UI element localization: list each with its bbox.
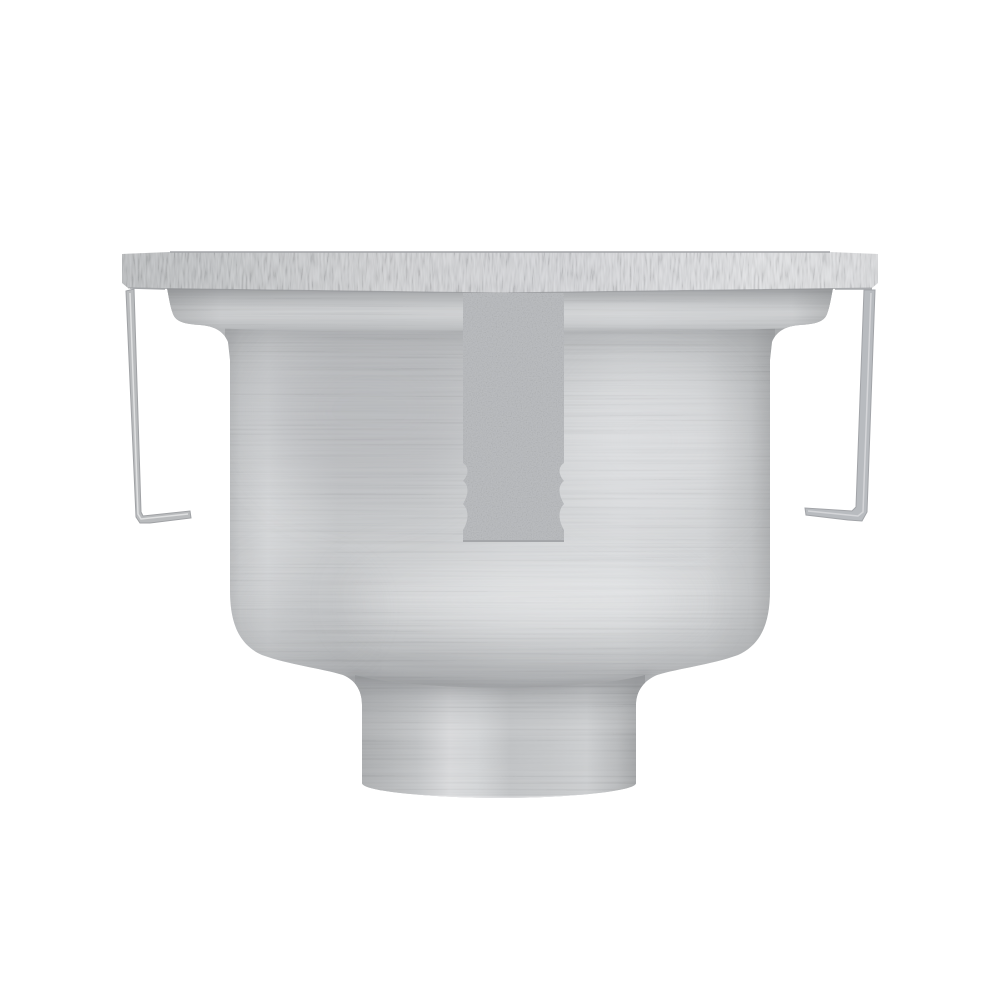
- cup body, lip and outlet silhouette: [160, 288, 840, 800]
- icon: right spring clip: [805, 290, 875, 521]
- shading blobs: [265, 370, 733, 646]
- shoulder shadow: [350, 674, 650, 688]
- outlet bottom rim: [422, 794, 579, 798]
- upper lip band: [160, 288, 840, 332]
- center clip tab: [463, 293, 564, 542]
- lathe lines: [405, 396, 710, 790]
- vertical shading of cup: [225, 325, 775, 690]
- top flange: [122, 252, 878, 293]
- outlet pipe: [355, 675, 645, 800]
- icon: left spring clip: [126, 289, 191, 523]
